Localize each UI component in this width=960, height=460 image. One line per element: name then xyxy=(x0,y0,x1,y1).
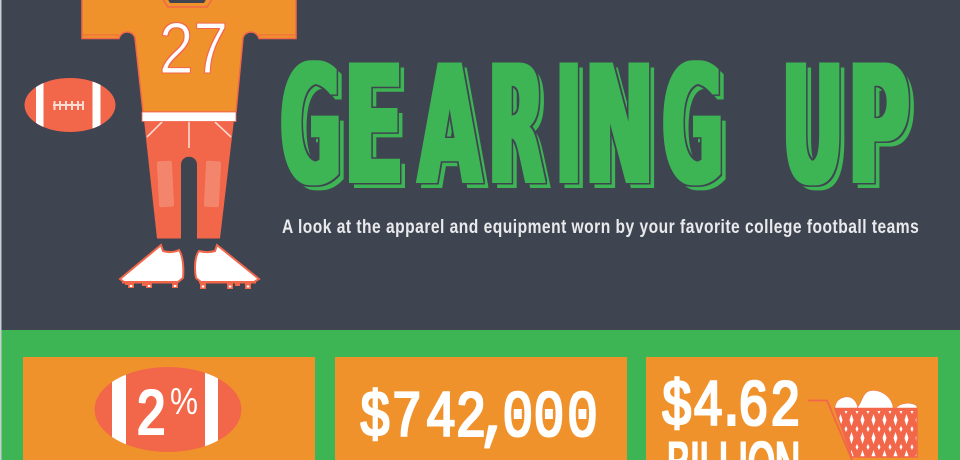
stat value: $742,000 xyxy=(360,382,598,456)
title: R xyxy=(488,30,544,221)
title: N xyxy=(585,31,654,222)
panel: $4.62 billion stat xyxy=(646,357,938,460)
title: E xyxy=(344,30,403,221)
subtitle: A look at the apparel and equipment worn by your favorite college football teams xyxy=(282,215,919,237)
icon: football with 2%: 2 xyxy=(136,380,167,454)
icon: shopping cart xyxy=(808,390,917,460)
icon: football xyxy=(24,78,116,132)
panel: $742,000 stat xyxy=(335,357,627,460)
background: dark header xyxy=(0,0,960,331)
right cleat xyxy=(195,245,259,289)
green stats band xyxy=(2,330,960,460)
pants xyxy=(144,120,234,238)
title: P xyxy=(848,30,909,222)
icon: football with 2% xyxy=(94,367,242,452)
title: U xyxy=(782,32,843,222)
title xyxy=(280,30,909,222)
title: I xyxy=(556,31,581,222)
jersey number: 27 xyxy=(159,9,228,89)
panel: 2% stat xyxy=(23,357,315,460)
stat value: $4.62 xyxy=(661,371,801,445)
title: G xyxy=(662,30,723,221)
belt xyxy=(142,112,236,122)
icon: football with 2%: % xyxy=(170,381,198,422)
left cleat xyxy=(120,245,183,288)
jersey xyxy=(82,0,296,112)
title: A xyxy=(419,31,481,222)
title: G xyxy=(280,30,341,221)
illustration: football player xyxy=(82,0,296,289)
